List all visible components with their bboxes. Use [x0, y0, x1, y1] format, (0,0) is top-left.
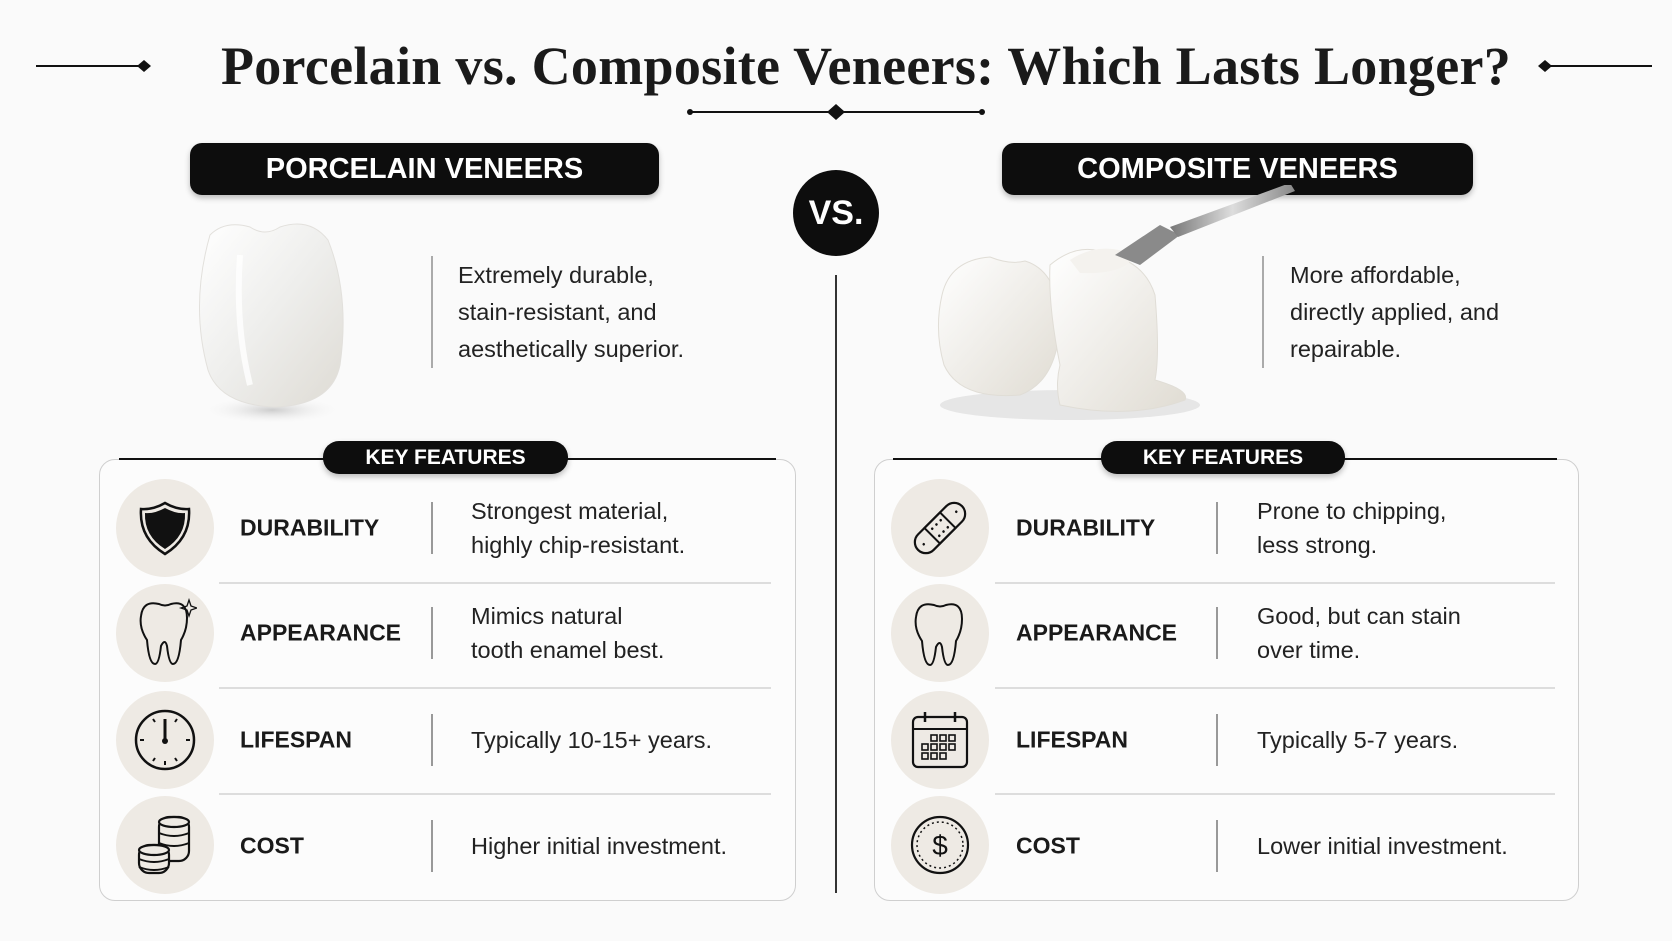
- panel: porcelain features: LIFESPAN: [240, 726, 352, 752]
- pill: composite: COMPOSITE VENEERS: [1077, 152, 1398, 184]
- panel: composite features: Typically 5-7 years.: [1257, 727, 1458, 753]
- key features pill: KEY FEATURES: [1143, 446, 1303, 468]
- panel: composite features: less strong.: [1257, 532, 1377, 558]
- panel: porcelain features: APPEARANCE: [240, 620, 401, 646]
- pill: composite: [1002, 143, 1473, 195]
- text: stain-resistant, and: [458, 299, 657, 325]
- panel: composite features: Prone to chipping,: [1257, 498, 1446, 524]
- panel: porcelain features: Mimics natural: [471, 603, 622, 629]
- panel: composite features: Good, but can stain: [1257, 603, 1461, 629]
- panel: porcelain features: Higher initial investment.: [471, 833, 727, 859]
- ornament left: [36, 60, 151, 72]
- row: durability: [891, 479, 989, 577]
- row: appearance: [116, 584, 214, 682]
- row: cost: $: [932, 830, 948, 861]
- vs badge: VS.: [809, 194, 863, 232]
- panel: composite features: LIFESPAN: [1016, 726, 1128, 752]
- panel: porcelain features: Typically 10-15+ years.: [471, 727, 712, 753]
- panel: porcelain features: Strongest material,: [471, 498, 668, 524]
- panel: porcelain features: tooth enamel best.: [471, 637, 664, 663]
- panel: composite features: APPEARANCE: [1016, 620, 1177, 646]
- text: Extremely durable,: [458, 262, 654, 288]
- text: More affordable,: [1290, 262, 1461, 288]
- row: cost: [116, 796, 214, 894]
- key features pill: [1101, 441, 1345, 474]
- panel: composite features: [874, 441, 1579, 901]
- panel: composite features: DURABILITY: [1016, 514, 1155, 540]
- key features pill: [323, 441, 568, 474]
- row: durability: [116, 479, 214, 577]
- intro: composite: [1262, 256, 1264, 368]
- row: cost: [891, 796, 989, 894]
- title: Porcelain vs. Composite Veneers: Which Lasts Longer?: [221, 36, 1511, 96]
- image: porcelain veneer: [199, 224, 344, 418]
- center divider: [835, 275, 837, 893]
- panel: porcelain features: COST: [240, 832, 304, 858]
- ornament right: [1538, 60, 1652, 72]
- row: lifespan: [891, 691, 989, 789]
- intro: porcelain: [431, 256, 433, 368]
- pill: porcelain: PORCELAIN VENEERS: [266, 152, 583, 184]
- vs badge: [793, 170, 879, 256]
- pill: porcelain: [190, 143, 659, 195]
- key features pill: KEY FEATURES: [365, 446, 526, 468]
- text: repairable.: [1290, 336, 1401, 362]
- text: directly applied, and: [1290, 299, 1499, 325]
- image: composite teeth: [938, 185, 1295, 420]
- panel: porcelain features: DURABILITY: [240, 514, 379, 540]
- panel: porcelain features: highly chip-resistant.: [471, 532, 685, 558]
- panel: composite features: over time.: [1257, 637, 1360, 663]
- text: aesthetically superior.: [458, 336, 684, 362]
- panel: porcelain features: [99, 441, 796, 901]
- row: lifespan: [116, 691, 214, 789]
- panel: composite features: Lower initial investment.: [1257, 833, 1508, 859]
- row: appearance: [891, 584, 989, 682]
- panel: composite features: COST: [1016, 832, 1080, 858]
- ornament under title: [687, 104, 985, 120]
